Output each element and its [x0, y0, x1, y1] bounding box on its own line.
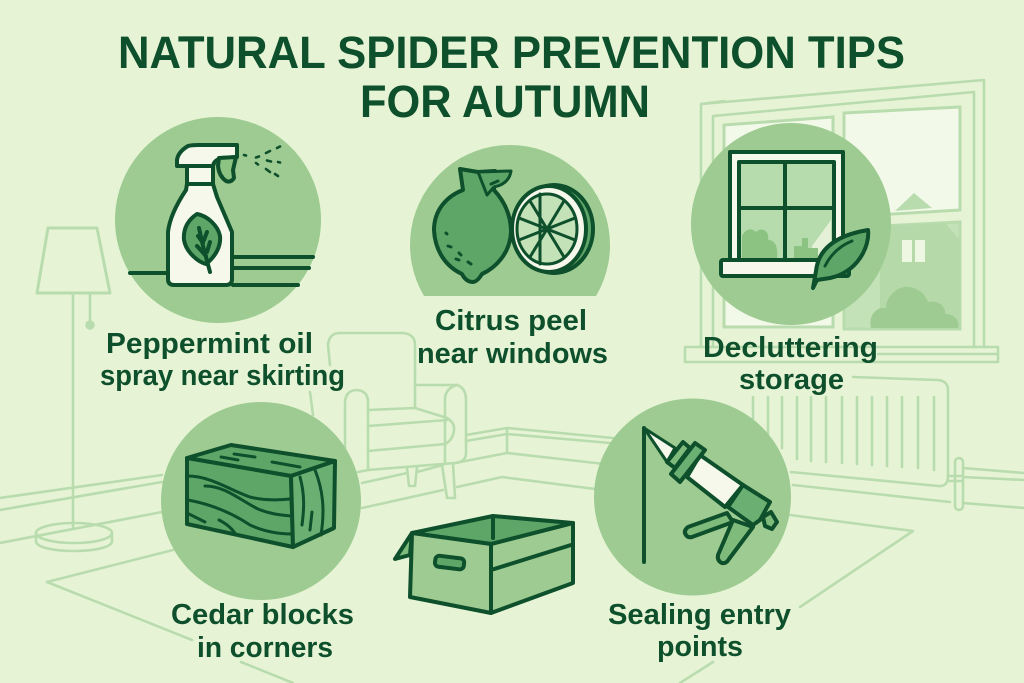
label [171, 599, 354, 664]
icon: spray bottle [168, 145, 237, 285]
panel: cedar blocks [161, 402, 361, 664]
icon: storage box [395, 516, 573, 613]
panel: peppermint oil spray [100, 117, 345, 392]
label: Decluttering [703, 332, 878, 364]
panel: decluttering storage [691, 123, 891, 396]
title [118, 27, 905, 127]
panel: sealing entry points [594, 398, 791, 663]
label: Sealing entry [608, 599, 791, 631]
title: FOR AUTUMN [360, 76, 650, 127]
icon: leaf [813, 230, 868, 288]
label: storage [739, 364, 844, 396]
label: Citrus peel [435, 305, 587, 337]
label: Cedar blocks [171, 599, 354, 631]
label: points [657, 631, 743, 663]
skirting board [130, 257, 313, 285]
label: in corners [197, 632, 333, 664]
icon: lemon [434, 169, 511, 282]
spray mist [244, 146, 280, 176]
icon: cedar block [187, 445, 335, 547]
circle background [115, 117, 321, 323]
icon: caulking gun [644, 428, 777, 563]
icon: citrus slice [512, 185, 593, 273]
room: window with house view [685, 80, 998, 362]
circle background [594, 398, 791, 596]
room: armchair [310, 333, 466, 498]
label [608, 599, 791, 663]
circle background [161, 402, 361, 600]
icon: window [721, 152, 849, 276]
label: near windows [417, 338, 608, 370]
label [417, 305, 608, 370]
title: NATURAL SPIDER PREVENTION TIPS [118, 27, 905, 78]
room: radiator [753, 377, 963, 510]
room: skirting and rug lines [0, 428, 1024, 683]
dome background [410, 145, 610, 296]
label [703, 332, 878, 396]
label [100, 328, 345, 392]
label: Peppermint oil [106, 328, 313, 360]
label: spray near skirting [100, 360, 345, 392]
panel: citrus peel [410, 145, 610, 370]
room: floor lamp [36, 228, 112, 551]
circle background [691, 123, 891, 325]
